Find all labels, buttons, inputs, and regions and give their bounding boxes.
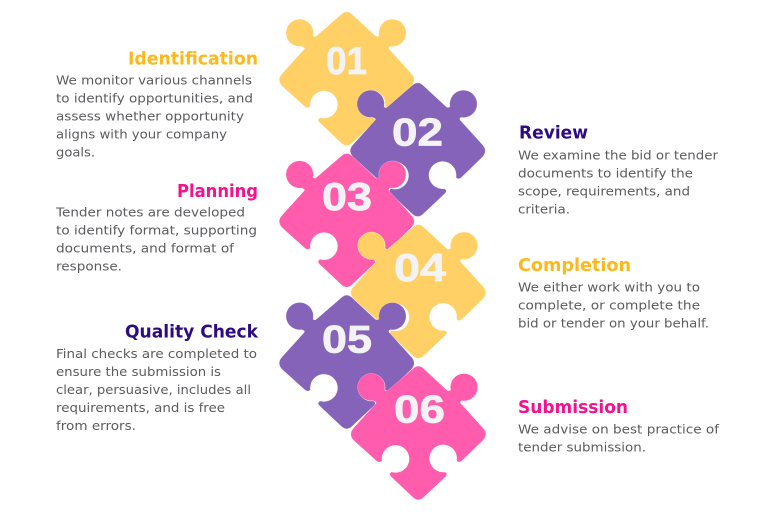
puzzle piece 01 [279,12,414,146]
body: Submission [518,422,720,454]
body: Quality Check [56,346,257,433]
heading: Completion: Completion [518,256,631,276]
body: Completion: bid or tender on your behalf. [518,316,709,330]
body: Planning: to identify format, supporting [56,222,257,238]
body: Quality Check: Final checks are completed to [56,346,257,361]
body: Planning: Tender notes are developed [55,204,245,220]
text block: Quality Check [56,322,258,433]
body: Review: We examine the bid or tender [518,148,719,162]
puzzle piece 03: 03 [322,176,372,219]
body: Planning: documents, and format of [56,240,235,256]
heading: Identification: Identification [128,50,258,70]
puzzle stack [279,12,486,500]
body: Completion: We either work with you to [518,280,700,294]
body: Identification: We monitor various channels [56,72,252,88]
body: Identification: goals. [56,144,95,160]
puzzle piece 05: 05 [322,318,372,362]
puzzle piece 05 [279,295,414,429]
body: Completion [518,280,709,330]
body: Quality Check: clear, persuasive, includes all [56,382,251,397]
text block: Completion [518,256,709,330]
body: Planning [55,204,257,274]
text block: Submission [518,398,720,454]
body: Review: documents to identify the [518,166,693,180]
body: Submission: We advise on best practice of [518,422,720,436]
puzzle piece 02 [350,83,485,217]
body: Review [518,148,719,216]
body: Identification: assess whether opportunity [56,108,244,124]
text block: Review [518,124,719,216]
body: Quality Check: requirements, and is free [56,400,225,415]
body: Submission: tender submission. [518,440,646,454]
heading: Submission: Submission [518,398,628,418]
puzzle piece 06: 06 [394,389,445,432]
puzzle piece 01: 01 [326,40,367,83]
body: Review: criteria. [518,202,570,216]
body: Planning: response. [56,258,122,274]
text block: Identification [56,50,258,160]
body: Identification [56,72,253,160]
body: Quality Check: from errors. [56,418,136,433]
body: Review: scope, requirements, and [518,184,690,198]
body: Quality Check: ensure the submission is [56,364,221,379]
heading: Quality Check: Quality Check [125,322,258,342]
heading: Review: Review [519,124,588,144]
puzzle piece 03 [279,153,414,287]
heading: Planning: Planning [177,182,258,202]
puzzle piece 04: 04 [394,247,446,290]
body: Completion: complete, or complete the [518,298,700,312]
puzzle piece 04 [351,225,486,358]
puzzle piece 06 [351,366,486,500]
body: Identification: to identify opportunities, and [56,90,253,106]
text block: Planning [55,182,258,274]
body: Identification: aligns with your company [56,126,227,142]
puzzle piece 02: 02 [392,112,443,154]
